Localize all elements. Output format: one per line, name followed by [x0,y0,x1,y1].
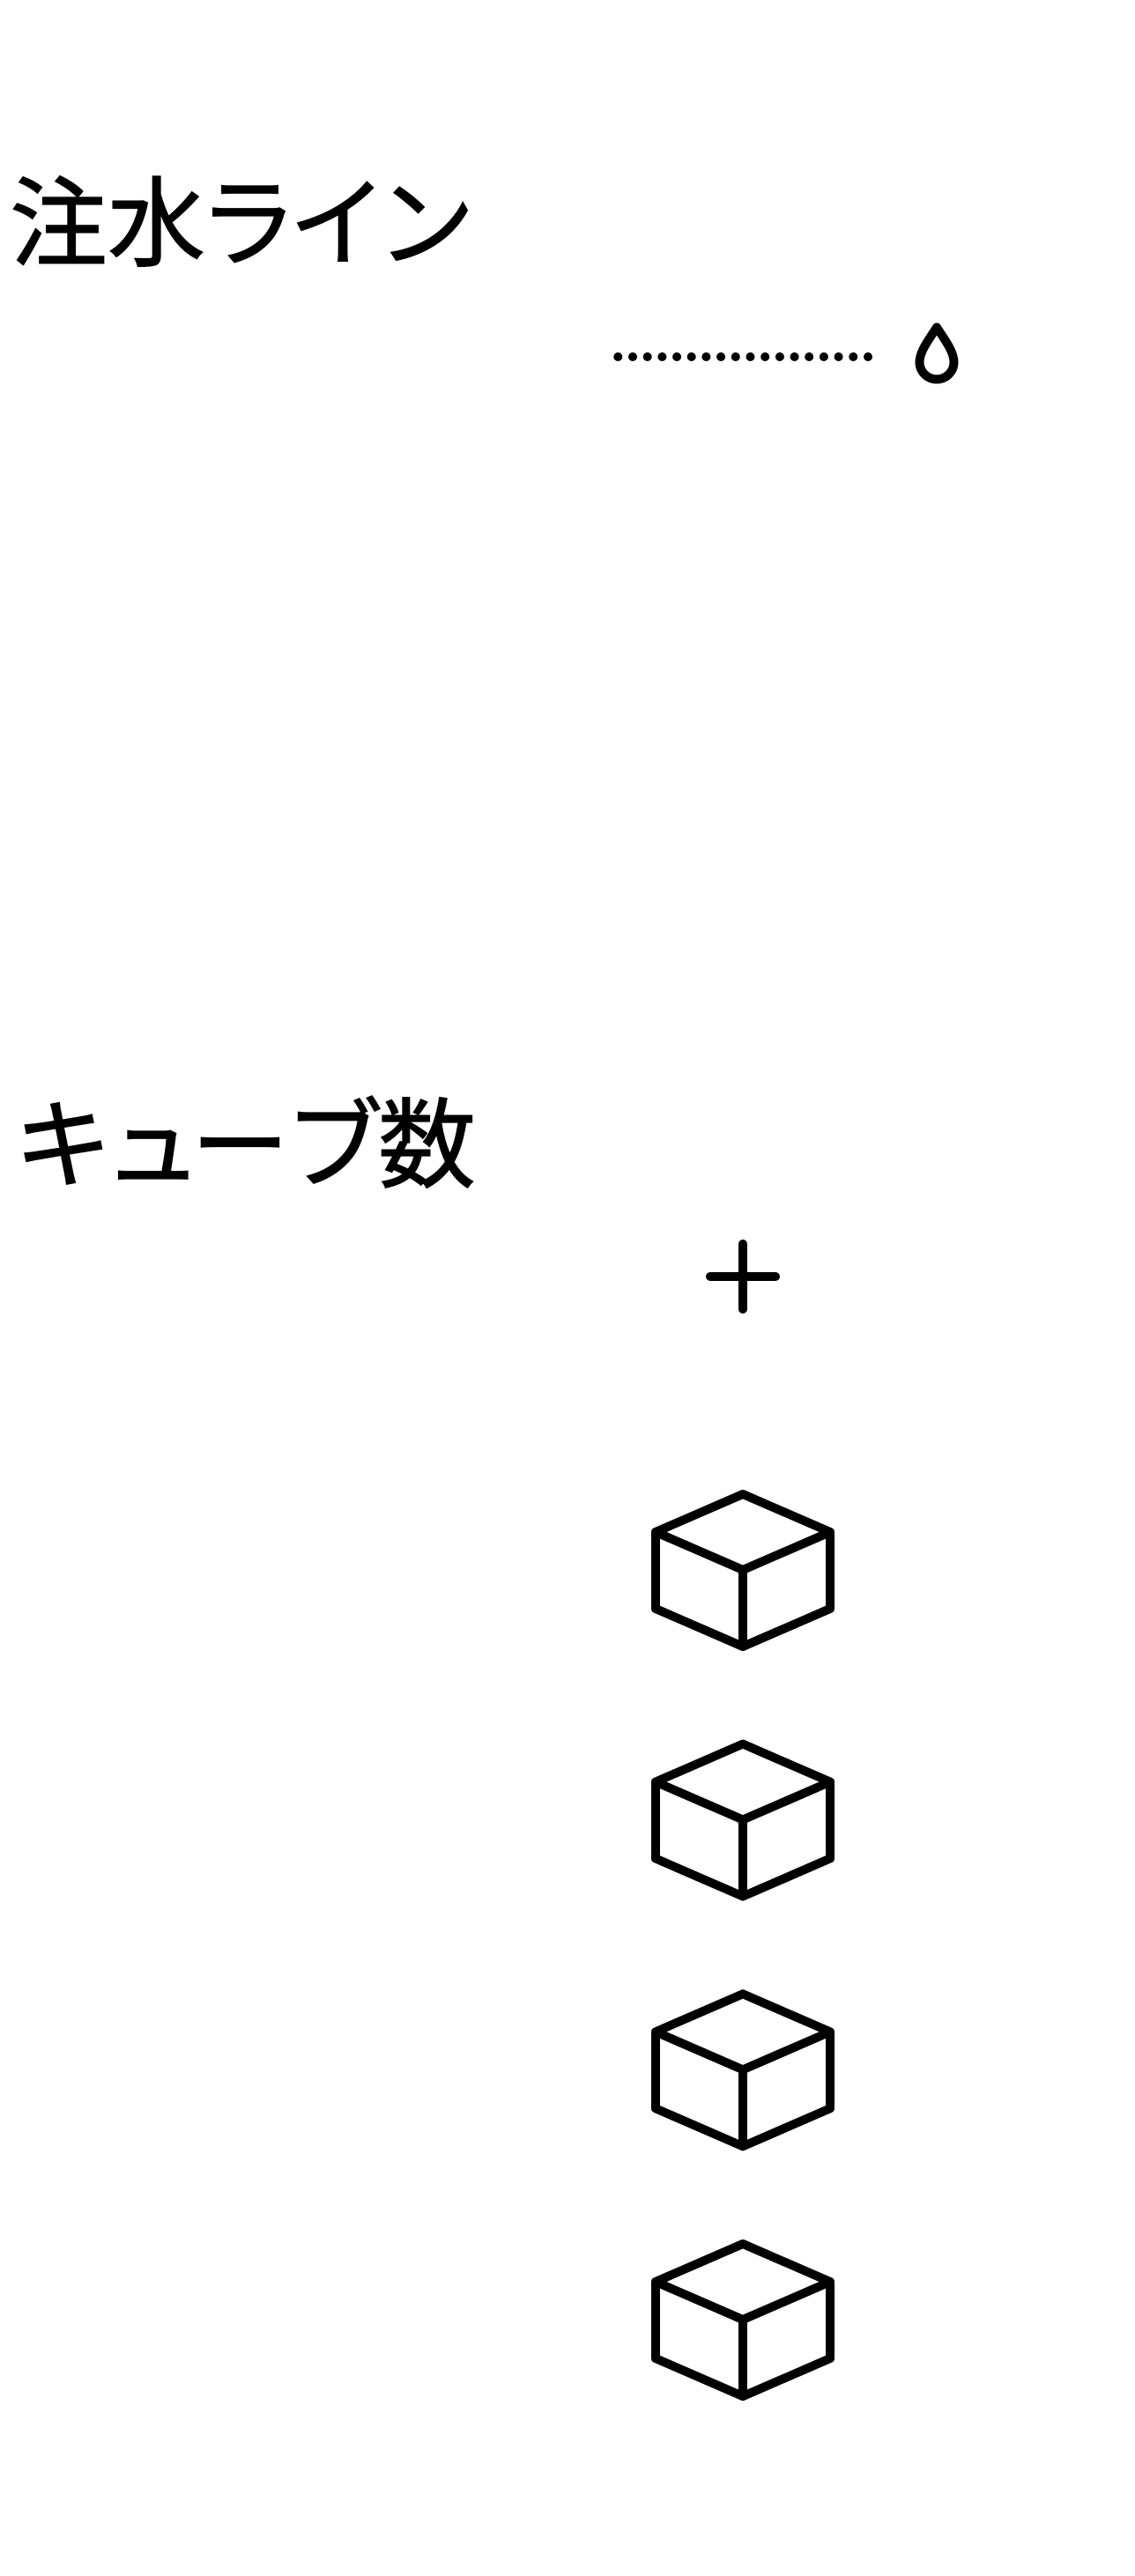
heading: cube count: キューブ数 [14,1092,476,1201]
icon: water drop [920,328,953,379]
heading: water fill line: 注水ライン [10,170,475,279]
dotted fill line [613,352,872,361]
icon: cube 4 [656,2244,830,2396]
icon: cube 1 [656,1494,830,1647]
icon: plus [710,1244,775,1309]
icon: cube 2 [656,1744,830,1897]
icon: cube 3 [656,1994,830,2146]
